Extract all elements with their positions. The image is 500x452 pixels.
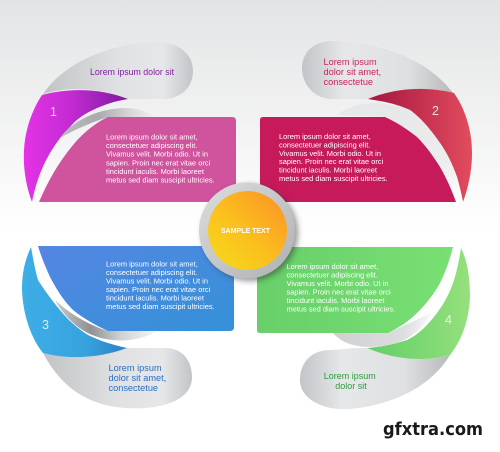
panel 1 text card [39, 117, 236, 202]
panel 4 grey label blob [300, 348, 450, 409]
panel 3 number: 3 [42, 318, 49, 332]
panel 1 body text: sapien. Proin nec erat vitae orci [106, 158, 211, 167]
panel 4 body text: consectetuer adipiscing elit. [286, 270, 378, 280]
panel 4 fold shadow [333, 312, 433, 347]
panel 4: green [257, 247, 470, 409]
panel 4 heading: dolor sit [335, 381, 367, 391]
panel 2 number: 2 [432, 104, 439, 118]
panel 1 body text: Lorem ipsum dolor sit amet, [106, 132, 198, 142]
panel 3 body text: consectetuer adipiscing elit. [106, 268, 197, 277]
panel 4 body text: Lorem ipsum dolor sit amet, [286, 262, 378, 271]
panel 3 body text: metus sed diam suscipit ultricies. [106, 302, 215, 311]
panel 1 heading: Lorem ipsum dolor sit [90, 67, 175, 77]
panel 4 body text: sapien. Proin nec erat vitae orci [286, 288, 391, 296]
panel 3 fold shadow [55, 300, 157, 340]
panel 4 body text: metus sed diam suscipit ultricies. [286, 304, 395, 314]
panel 4 body text: Vivamus velit. Morbi odio. Ut in [286, 279, 388, 288]
panel 2 body text: metus sed diam suscipit ultricies. [279, 174, 388, 183]
panel 2 heading: Lorem ipsum [324, 57, 377, 67]
panel 2 body text: consectetuer adipiscing elit. [279, 140, 370, 149]
watermark: gfxtra.com [383, 419, 483, 440]
panel 2 fold highlight [338, 103, 463, 202]
panel 4 body text: tincidunt iaculis. Morbi laoreet [286, 296, 385, 305]
panel 3 heading: dolor sit amet, [108, 373, 166, 383]
panel 3 text card [38, 246, 234, 331]
panel 3 body text: sapien. Proin nec erat vitae orci [106, 285, 211, 294]
background [0, 0, 500, 230]
badge label: SAMPLE TEXT [221, 228, 271, 235]
panel 1 grey label blob [43, 42, 193, 99]
panel 4 coloured band [367, 248, 470, 359]
panel 3 grey label blob [43, 348, 192, 408]
panel 2 heading: consectetue [324, 77, 373, 87]
panel 3 body text: Vivamus velit. Morbi odio. Ut in [106, 276, 208, 286]
panel 1 coloured band [24, 90, 128, 202]
panel 2 body text: tincidunt iaculis. Morbi laoreet [279, 166, 378, 175]
panel 1 fold shadow [60, 108, 155, 138]
panel 3 coloured band [22, 247, 127, 357]
panel 2 body text: Lorem ipsum dolor sit amet, [279, 132, 371, 141]
panel 1 body text: consectetuer adipiscing elit. [106, 141, 197, 150]
panel 4 number: 4 [445, 313, 452, 327]
panel 2 body text: sapien. Proin nec erat vitae orci [279, 157, 384, 166]
panel 1 body text: metus sed diam suscipit ultricies. [106, 176, 215, 184]
panel 4 text card [257, 247, 453, 333]
panel 2 grey label blob [302, 41, 453, 99]
panel 2 heading: dolor sit amet, [324, 67, 381, 77]
central badge [199, 182, 298, 281]
panel 1 body text: Vivamus velit. Morbi odio. Ut in [106, 150, 208, 159]
panel 3 body text: Lorem ipsum dolor sit amet, [106, 260, 198, 268]
panel 2 body text: Vivamus velit. Morbi odio. Ut in [279, 149, 381, 158]
panel 4 heading: Lorem ipsum [324, 371, 376, 381]
panel 3 heading: consectetue [108, 383, 158, 393]
panel 2: crimson [260, 41, 472, 202]
panel 3 heading: Lorem ipsum [108, 363, 162, 373]
panel 3 body text: tincidunt iaculis. Morbi laoreet [106, 294, 205, 302]
panel 2 text card [260, 117, 456, 202]
panel 1: magenta [24, 42, 236, 202]
panel 1 number: 1 [50, 105, 57, 119]
panel 1 body text: tincidunt iaculis. Morbi laoreet [106, 167, 205, 176]
panel 2 coloured band [368, 89, 472, 202]
panel 3: blue [22, 246, 234, 408]
